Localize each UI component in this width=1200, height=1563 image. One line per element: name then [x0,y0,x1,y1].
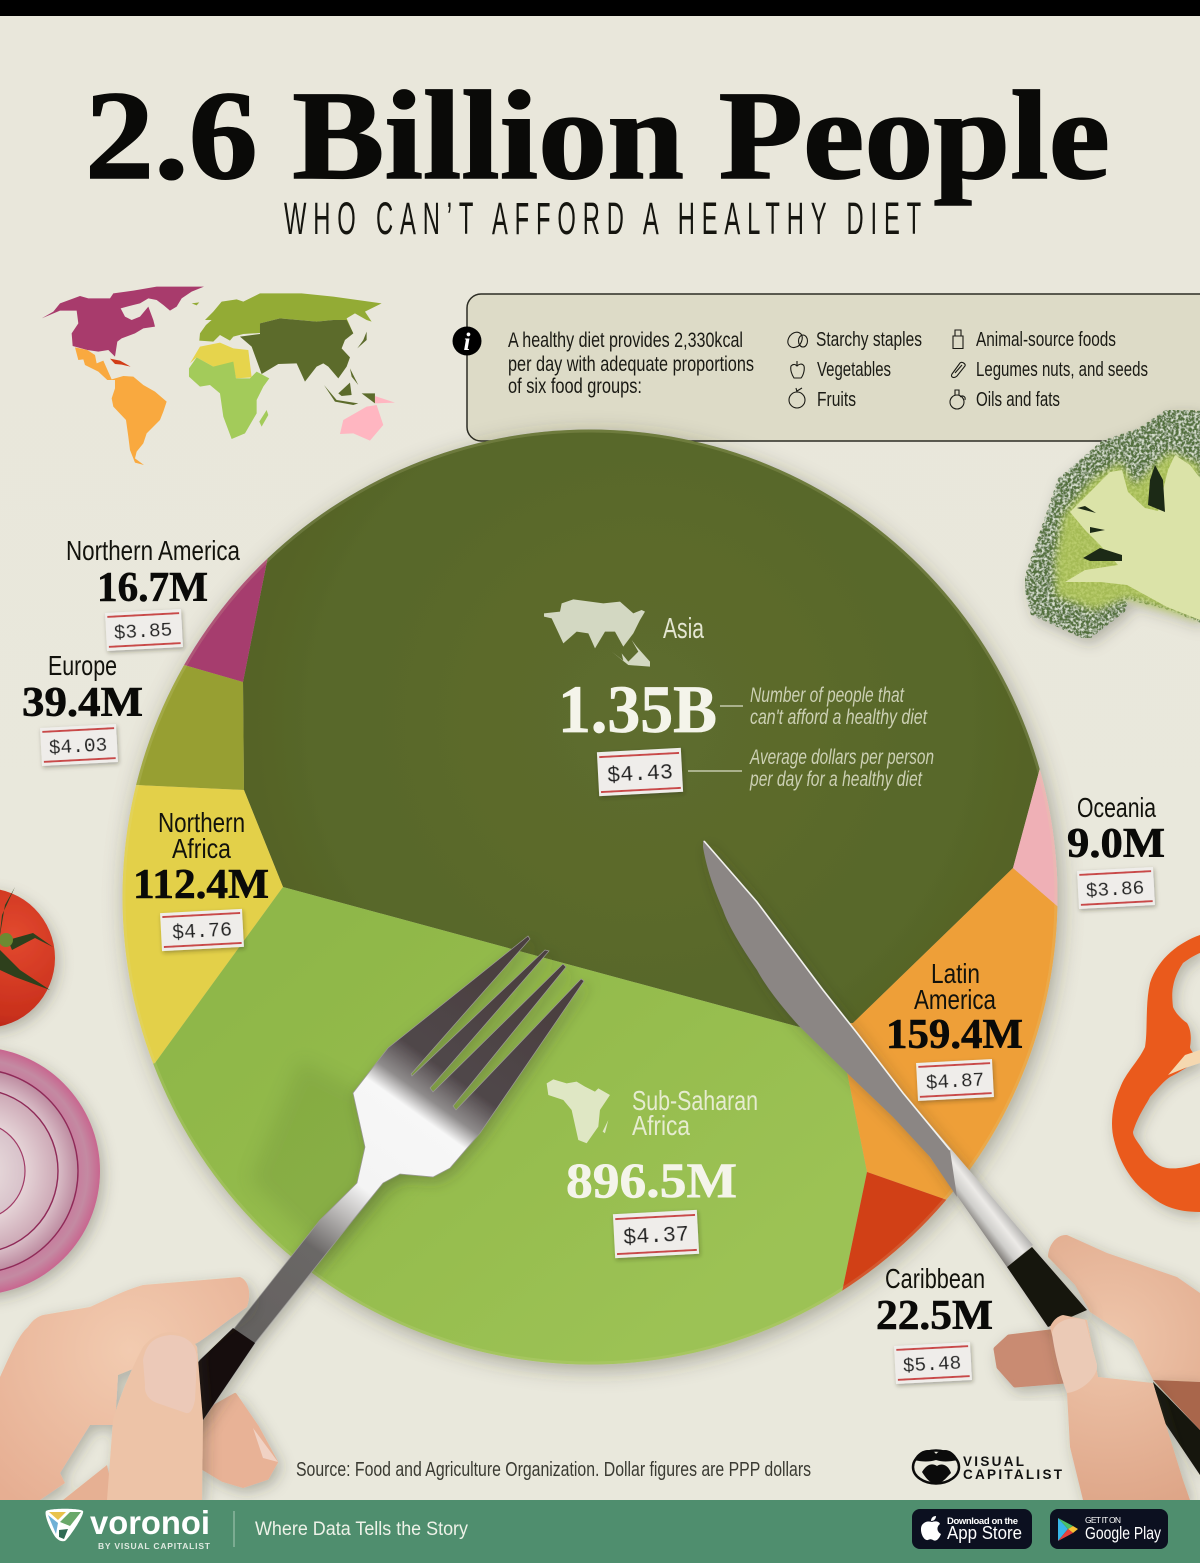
App Store button: App Store [947,1522,1022,1543]
tomato body [0,888,55,1028]
value: 1.35B: 1.35B [558,671,717,747]
vegetable: onion [0,1047,100,1295]
food group list: Starchy staples [816,328,922,351]
price tag: Northern America [105,609,183,651]
slice: Latin America [847,868,1073,1214]
slice: Asia [243,422,1054,1028]
info panel [452,294,1200,441]
annotation: dollars [749,746,934,791]
value: 896.5M: 896.5M [566,1152,737,1208]
region name: Northern Africa: Africa [172,833,231,864]
value: 112.4M: 112.4M [133,862,269,908]
pepper pith [1168,1050,1200,1075]
leader line: people [720,705,743,707]
vegetable: tomato [0,887,55,1028]
region name: Northern Africa: Northern [158,807,245,838]
annotation: people [750,684,928,729]
fork [90,936,584,1500]
Caribbean label group [876,1263,993,1384]
region name: Caribbean: Caribbean [885,1263,985,1294]
leader line: dollars [688,770,742,772]
value: 39.4M: 39.4M [22,680,143,726]
region name: Latin America: America [914,984,996,1015]
slice: Caribbean [840,1172,954,1300]
logo wordmark: VISUAL [963,1454,1024,1469]
map: Oceania [340,396,395,441]
plate [112,421,1074,1383]
region name: Latin America: Latin [931,958,980,989]
price tag: Latin America: $4.87 [925,1069,985,1095]
info text [508,329,754,398]
region name: Northern America: Northern America [66,535,240,566]
map: Sub-Saharan Africa [189,357,269,439]
annotation: people: can't afford a healthy diet [750,706,928,729]
Northern Africa label group [133,807,269,951]
price tag: Sub-Saharan Africa [613,1210,699,1258]
region name: Sub-Saharan Africa: Africa [632,1110,690,1141]
info text: per day with adequate proportions [508,353,754,376]
logo wordmark [963,1454,1063,1482]
right hand upper [1048,1235,1200,1382]
fork handle black band [90,1328,255,1500]
palm and index finger [0,1277,249,1500]
slice: Europe [130,663,244,792]
right hand thumb [1050,1315,1190,1500]
voronoi wordmark: voronoi [90,1504,210,1541]
fingernail [253,1428,278,1462]
broccoli yellow-green zone [1055,452,1200,620]
ring finger [63,1465,115,1500]
thumbnail [143,1335,197,1413]
annotation: dollars: per day for a healthy diet [749,768,923,791]
info badge [452,326,482,356]
broccoli gaps [1077,465,1165,561]
price tag: Northern Africa [160,909,244,951]
slice: Northern Africa [112,784,283,1073]
knife edge highlight [704,841,950,1150]
region name: Europe: Europe [48,650,117,681]
value: 159.4M: 159.4M [886,1012,1023,1058]
onion core [0,1122,25,1220]
food group icons [788,330,965,409]
panel box [467,294,1200,441]
world map [42,287,395,465]
price tag: Asia: $4.43 [607,760,674,789]
knife blade [703,840,957,1197]
value: 9.0M: 9.0M [1067,821,1165,867]
icon: play triangle [1058,1518,1078,1541]
logo mark [913,1450,959,1484]
Asia label group [544,599,934,796]
voronoi tagline: BY VISUAL CAPITALIST [98,1541,211,1551]
knife handle emerging [1153,1382,1200,1475]
footer divider [233,1511,235,1547]
Oceania label group [1067,792,1165,909]
food group list: Animal-source foods [976,328,1116,351]
vegetable: red pepper [1112,935,1200,1212]
slice: Oceania [1013,769,1073,914]
price tag: Northern Africa: $4.76 [172,919,233,946]
annotation: dollars: Average dollars per person [749,746,934,769]
food group list: Fruits [817,388,856,411]
value: 16.7M: 16.7M [97,565,208,611]
plate rim [124,431,1056,1363]
price tag: Caribbean: $5.48 [902,1353,962,1378]
region name: Oceania: Oceania [1077,792,1156,823]
broccoli stem [1065,455,1200,620]
map: Caribbean [110,359,131,367]
title: 2.6 Billion People [85,66,1110,206]
Google Play button: Google Play [1085,1523,1161,1543]
footer bar [0,1500,1200,1563]
voronoi logo [46,1504,211,1551]
slice: Northern America [180,558,268,682]
onion outer ring [0,1047,100,1295]
voronoi icon [46,1509,83,1541]
price tag: Northern America: $3.85 [113,620,173,645]
Google Play button: GET IT ON [1085,1515,1121,1525]
fork shadow on plate [256,1068,404,1248]
finger behind handle [1153,1380,1200,1430]
food group list: Oils and fats [976,388,1060,411]
map: Northern Africa [190,343,252,378]
footer slogan: Where Data Tells the Story [255,1519,468,1540]
logo wordmark: CAPITALIST [963,1467,1063,1482]
info text: of six food groups: [508,375,642,398]
Visual Capitalist logo [913,1450,1063,1484]
onion second ring [0,1069,78,1273]
icon: apple [921,1516,941,1541]
price tag: Sub-Saharan Africa: $4.37 [623,1222,690,1251]
left hand [0,1277,249,1500]
vegetable: broccoli [1025,410,1200,638]
region name: Northern Africa [158,807,245,864]
tomato stem [0,887,53,990]
tomato calyx [0,933,13,947]
Europe label group [22,650,143,766]
top bar [0,0,1200,16]
region name: Sub-Saharan Africa [632,1085,758,1141]
icon: Asia map [544,599,650,667]
icon: Africa map [547,1079,610,1143]
App Store button [912,1509,1032,1549]
value: 22.5M: 22.5M [876,1293,993,1339]
food group list: Vegetables [817,358,891,381]
slice: Sub-Saharan Africa [147,887,870,1382]
Sub-Saharan Africa label group [547,1079,758,1258]
thumbnail [1052,1318,1097,1393]
Latin America label group [886,958,1023,1101]
Northern America label group [66,535,240,651]
region name: Sub-Saharan Africa: Sub-Saharan [632,1085,758,1116]
map: Northern America [42,287,204,357]
knife handle [1007,1247,1087,1327]
info badge: i [464,329,471,356]
price tag: Europe: $4.03 [48,735,108,760]
map: Europe and Russia [192,293,382,342]
Google Play button [1050,1509,1168,1549]
price tag: Asia [597,748,683,796]
pepper flesh [1112,935,1200,1212]
food group list [816,328,1148,411]
left hand middle finger [203,1395,278,1486]
price tag: Oceania: $3.86 [1085,878,1145,903]
right hand lower finger [996,1332,1065,1385]
region name: Latin America [914,958,996,1015]
App Store button: Download on the [947,1516,1018,1527]
map: Asia [240,318,375,405]
price tag: Latin America [916,1059,994,1101]
knife [703,840,1200,1475]
onion third ring [0,1089,58,1253]
broccoli florets [1025,410,1200,638]
fork body [90,936,584,1500]
source note: Source: Food and Agriculture Organization. Dollar figures are PPP dollars [296,1459,811,1481]
map: Latin America [75,347,167,465]
knife neck [905,1095,1033,1267]
region name: Asia: Asia [663,613,705,645]
annotation: people: Number of people that [750,684,905,707]
info text: A healthy diet provides 2,330kcal [508,329,743,352]
thumb [107,1332,203,1500]
